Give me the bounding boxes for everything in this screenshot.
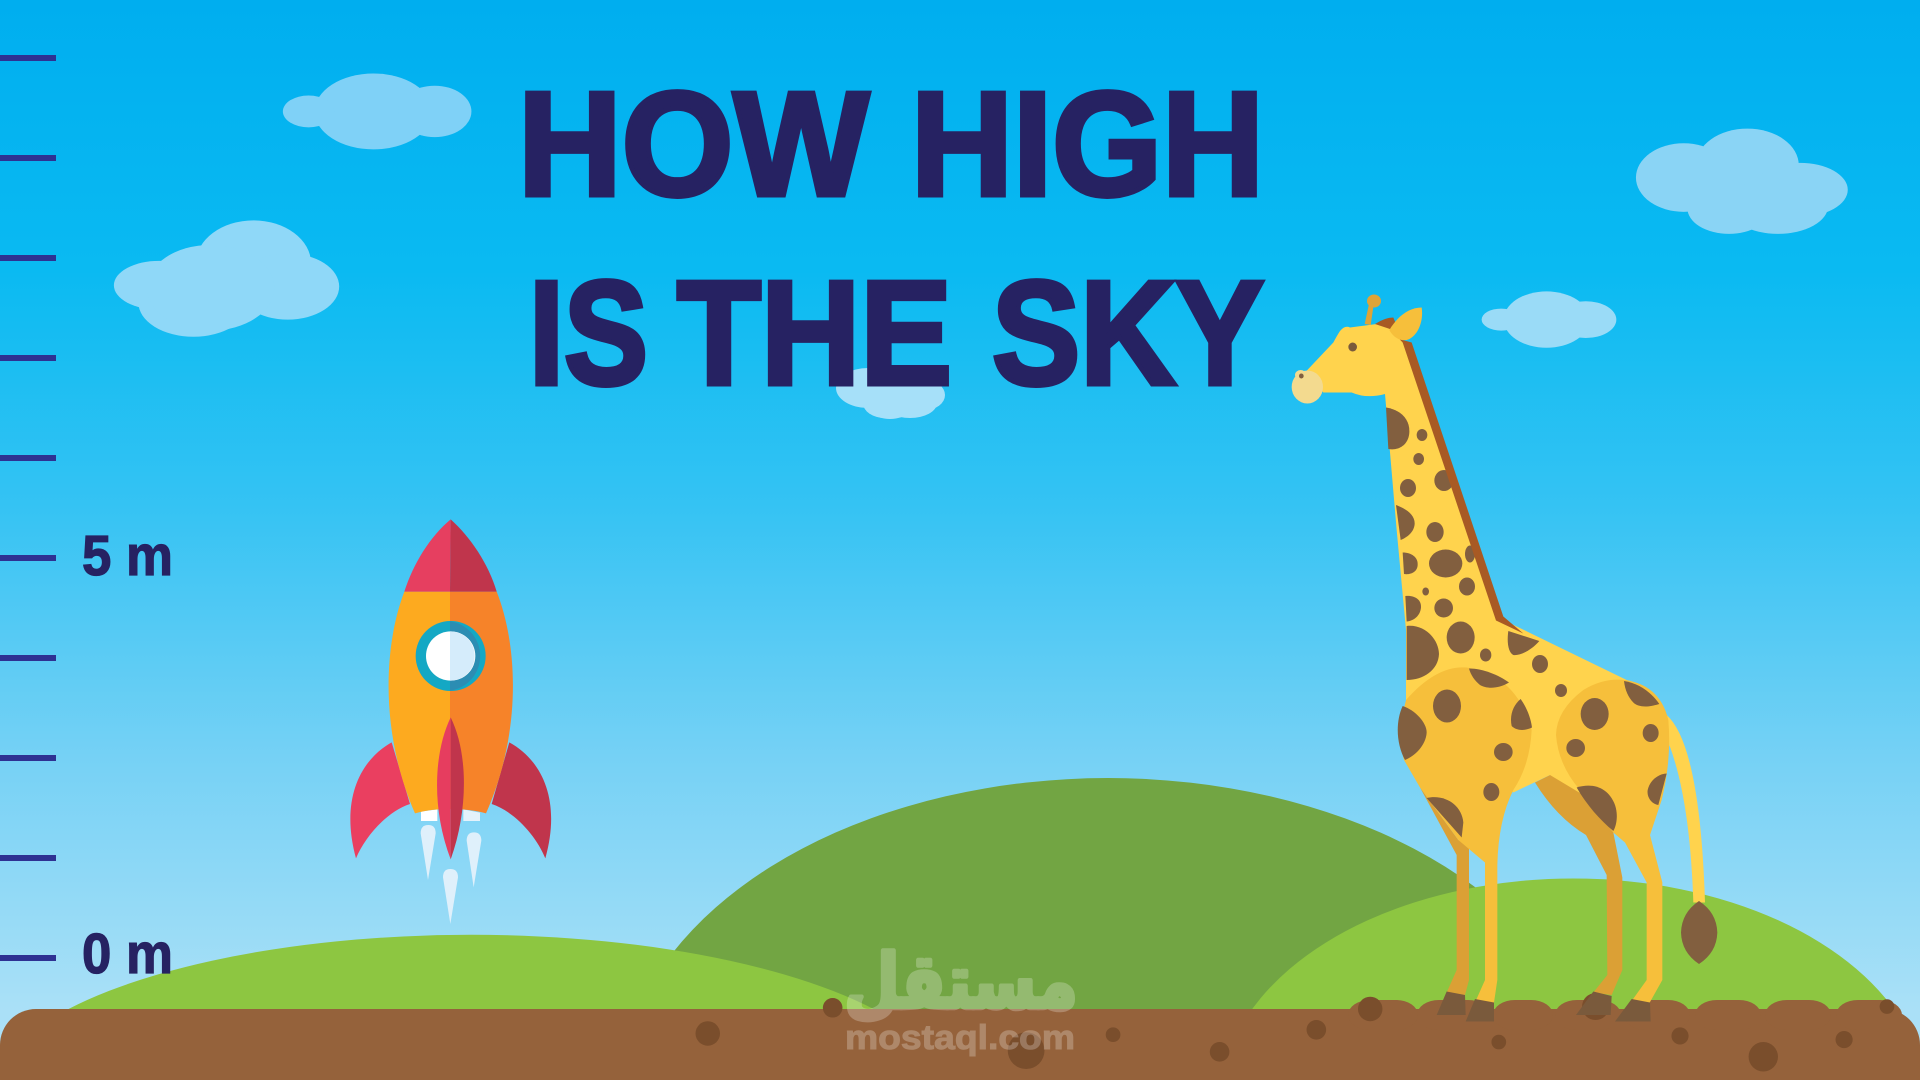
- hill: right: [1239, 878, 1907, 1030]
- cloud: top right: [1636, 129, 1848, 234]
- label: 0 m: 0 m: [82, 922, 173, 986]
- watermark: مستقل: [844, 939, 1078, 1026]
- giraffe far legs: [1420, 768, 1622, 995]
- title: THE: [677, 251, 952, 416]
- giraffe tail tuft: [1681, 901, 1717, 964]
- rocket: [350, 519, 551, 924]
- title: HOW: [518, 62, 869, 227]
- giraffe front shoulder and leg: [1401, 667, 1532, 1002]
- giraffe tail: [1667, 715, 1705, 902]
- rocket nose cone: [404, 519, 497, 592]
- title: SKY: [992, 251, 1264, 416]
- title: IS: [529, 251, 648, 416]
- giraffe muzzle: [1292, 370, 1323, 404]
- rocket fins: [350, 742, 551, 858]
- rocket flames: [421, 825, 481, 924]
- hill: dark green centre: [630, 778, 1586, 1030]
- dirt pebbles: [696, 993, 1894, 1071]
- cloud: near giraffe: [1482, 291, 1616, 348]
- rocket centre fin: [437, 717, 464, 859]
- cloud: behind title: [836, 368, 945, 419]
- cloud: left: [114, 220, 339, 337]
- giraffe: [1292, 294, 1717, 1022]
- giraffe ear: [1389, 308, 1422, 340]
- cloud: top left: [283, 73, 471, 149]
- giraffe haunch and hind leg: [1556, 680, 1669, 1005]
- giraffe spots: [1386, 408, 1667, 838]
- giraffe hooves: [1437, 992, 1651, 1022]
- hill: left: [34, 935, 908, 1030]
- ground: [0, 1000, 1920, 1080]
- giraffe horn: [1365, 294, 1381, 325]
- label: 5 m: 5 m: [82, 524, 173, 588]
- rocket window: [416, 621, 486, 691]
- giraffe eye: [1348, 342, 1357, 352]
- title: [518, 62, 1264, 416]
- height ruler: [0, 55, 56, 961]
- rocket body: [389, 592, 513, 813]
- giraffe mane: [1375, 318, 1523, 634]
- rocket exhaust nozzle: [421, 809, 480, 821]
- giraffe head and body: [1305, 324, 1669, 835]
- watermark: mostaql.com: [845, 1019, 1075, 1057]
- title: HIGH: [911, 62, 1264, 227]
